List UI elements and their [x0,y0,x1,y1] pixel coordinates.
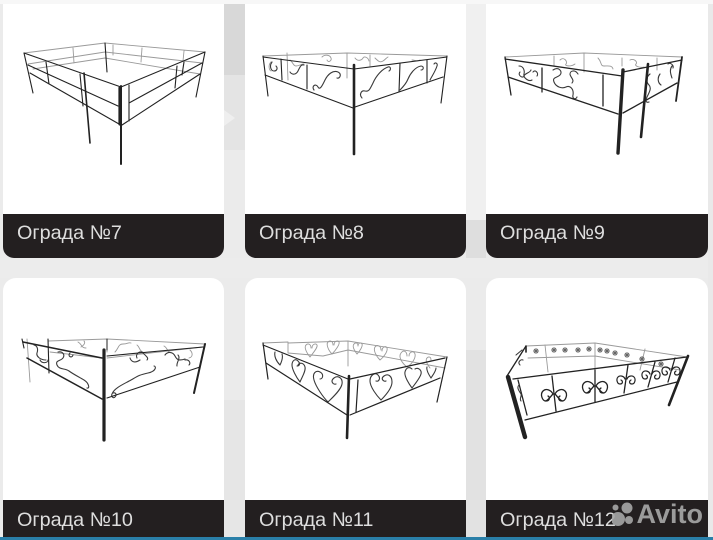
fence image: heart fence No 11 [262,340,448,440]
fence image: scroll fence No 8 [262,52,448,156]
panel: Ограда №9 [486,4,708,258]
fence image: ornate fence No 10 [22,338,206,442]
caption: Ограда №8: Ограда №8 [259,222,364,244]
panel: Ограда №10 [3,278,224,538]
fence image: ornate fence No 9 [504,52,683,155]
fence image: fence No 12 [506,342,690,440]
caption: Ограда №9: Ограда №9 [500,222,605,244]
panel: Ограда №7 [3,4,224,258]
caption: Ограда №9 [486,214,708,258]
fence image: rail fence No 7 [23,42,206,165]
caption: Ограда №10: Ограда №10 [17,509,133,531]
caption: Ограда №7 [3,214,224,258]
panel: Ограда №8 [245,4,466,258]
bottom edge stripe [0,537,713,540]
panel: Ограда №11 [245,278,466,538]
caption: Ограда №8 [245,214,466,258]
panel: Ограда №12 [486,278,708,538]
caption: Ограда №11 [245,500,466,538]
caption: Ограда №12 [486,500,708,538]
caption: Ограда №10 [3,500,224,538]
caption: Ограда №12: Ограда №12 [500,509,616,531]
caption: Ограда №7: Ограда №7 [17,222,122,244]
caption: Ограда №11: Ограда №11 [259,509,373,531]
